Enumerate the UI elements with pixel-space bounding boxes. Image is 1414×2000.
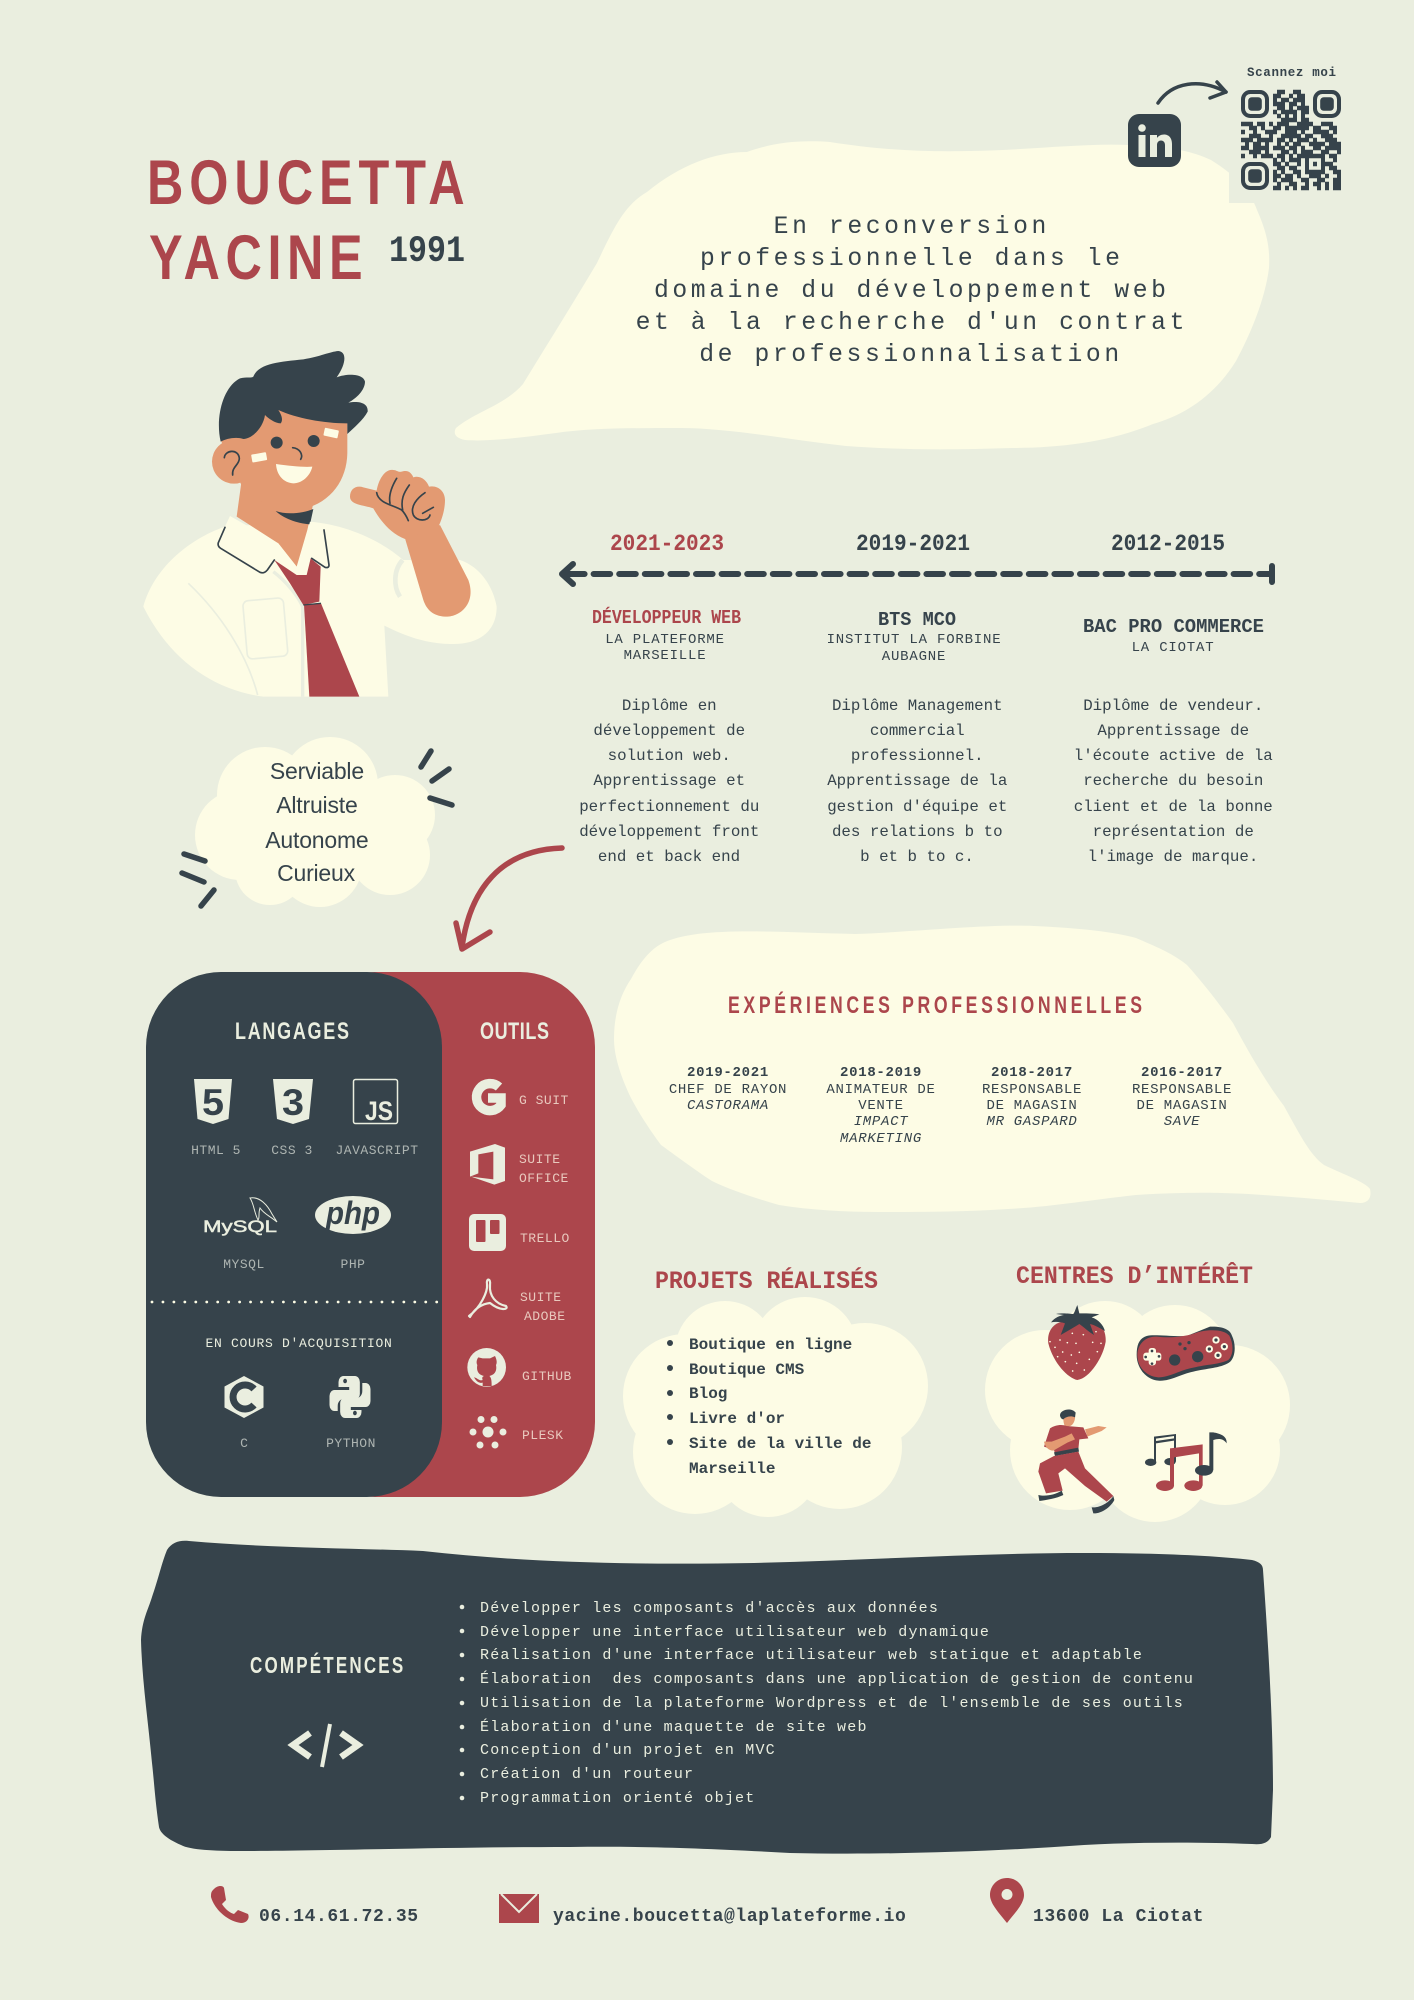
column: BTS MCO: professionnel.	[851, 747, 984, 765]
icon: Office	[470, 1144, 505, 1185]
experience: Impact Marketing: MARKETING	[840, 1131, 922, 1147]
arrow: LinkedIn to QR	[1158, 82, 1226, 103]
column: développeur web: perfectionnement du	[579, 798, 759, 816]
timeline years: 2019-2021	[856, 531, 970, 557]
icon: MySQL: MySQL	[203, 1217, 277, 1236]
experience: Save: SAVE	[1164, 1114, 1200, 1130]
cloud shape	[985, 1301, 1290, 1522]
projects text: Marseille	[689, 1460, 775, 1478]
panel shape	[141, 1541, 1273, 1854]
timeline years: 2021-2023	[610, 531, 724, 557]
neck	[237, 480, 313, 567]
column: bac pro commerce: recherche du besoin	[1083, 772, 1263, 790]
heading: outils: OUTILS	[480, 1019, 549, 1045]
column: bac pro commerce: Apprentissage de	[1097, 722, 1249, 740]
label: MySQL: MYSQL	[223, 1257, 265, 1272]
icon: Plesk	[470, 1416, 506, 1448]
experience: Save	[1132, 1065, 1232, 1130]
label: GitHub: GITHUB	[522, 1369, 572, 1384]
objective text: domaine du développement web	[654, 277, 1170, 305]
skills list: Élaboration des composants dans une application de gestion de contenu	[480, 1670, 1194, 1688]
column: bac pro commerce: BAC PRO COMMERCE	[1083, 616, 1264, 638]
icon: Trello	[469, 1214, 506, 1251]
experience: Impact Marketing: 2018-2019	[840, 1065, 922, 1081]
experience: Save: 2016-2017	[1141, 1065, 1223, 1081]
label: JavaScript: JAVASCRIPT	[335, 1143, 419, 1158]
qualities text: Altruiste	[276, 792, 358, 818]
icon: JavaScript: JS	[365, 1096, 393, 1126]
label: Suite Adobe: SUITE	[520, 1290, 562, 1305]
column: développeur web: Diplôme en	[622, 697, 717, 715]
icon: map pin	[990, 1878, 1024, 1923]
glasses glints, eyes, nose, mouth	[224, 428, 339, 483]
label: Plesk: PLESK	[522, 1428, 564, 1443]
qualities text: Serviable	[270, 758, 364, 784]
skills list: Développer une interface utilisateur web dynamique	[480, 1624, 990, 1641]
skills list: Conception d'un projet en MVC	[480, 1742, 776, 1759]
illustration: smiling man in shirt and tie	[143, 351, 497, 697]
dotted separator	[152, 1301, 440, 1303]
sparkle strokes	[182, 751, 452, 906]
experience: Castorama: CHEF DE RAYON	[669, 1082, 787, 1098]
contact: location	[990, 1878, 1204, 1927]
label: en cours d'acquisition: EN COURS D'ACQUISITION	[205, 1336, 393, 1351]
skills list: Programmation orienté objet	[480, 1790, 755, 1807]
qualities text: Curieux	[277, 860, 356, 886]
hair	[219, 351, 368, 442]
column: développeur web: LA PLATEFORME	[605, 632, 725, 648]
arrow: dashed timeline	[562, 564, 1272, 584]
experience: Save: RESPONSABLE	[1132, 1082, 1232, 1098]
cloud: projects list	[623, 1297, 928, 1517]
panel: languages and tools	[146, 972, 595, 1497]
projects text: Boutique CMS	[689, 1361, 805, 1379]
shirt	[143, 522, 497, 697]
cloud: personal qualities	[182, 737, 452, 907]
icon: phone	[211, 1886, 249, 1923]
column: BTS MCO: AUBAGNE	[882, 649, 946, 665]
heading: EXPÉRIENCES PROFESSIONNELLES	[728, 990, 1142, 1019]
icon: HTML5: 5	[202, 1082, 224, 1123]
column: BTS MCO: b et b to c.	[860, 848, 974, 866]
contact: email	[499, 1894, 906, 1927]
arrow: curved red pointing to skills panel	[456, 848, 562, 949]
experience: Impact Marketing	[826, 1065, 936, 1147]
label: Suite Office: OFFICE	[519, 1171, 569, 1186]
column: développeur web: développement de	[593, 722, 745, 740]
column: BTS MCO	[827, 609, 1017, 866]
icon: envelope	[499, 1894, 539, 1923]
timeline years	[610, 531, 1225, 557]
phone number: 06.14.61.72.35	[259, 1907, 419, 1927]
icon: code brackets	[293, 1724, 358, 1767]
icon: game controller	[1137, 1327, 1235, 1381]
column: développeur web: Apprentissage et	[593, 772, 745, 790]
speech bubble: objective	[455, 141, 1269, 449]
timeline	[562, 531, 1282, 866]
label: HTML 5: HTML 5	[191, 1143, 241, 1158]
projects text: Livre d'or	[689, 1410, 785, 1428]
heading: projets réalisés: PROJETS RÉALISÉS	[655, 1266, 878, 1296]
skills list: Réalisation d'une interface utilisateur web statique et adaptable	[480, 1647, 1143, 1664]
column: bac pro commerce: client et de la bonne	[1074, 798, 1273, 816]
experience: Save: DE MAGASIN	[1136, 1098, 1228, 1114]
name second line: YACINE	[149, 223, 363, 293]
icon: JavaScript	[354, 1080, 398, 1126]
bubble shape	[614, 926, 1371, 1212]
icon: strawberry	[1048, 1305, 1106, 1380]
objective text: de professionnalisation	[699, 341, 1123, 369]
tie	[274, 558, 359, 697]
objective text: professionnelle dans le	[700, 245, 1124, 273]
cloud: interests	[985, 1301, 1290, 1522]
experience: Mr Gaspard: RESPONSABLE	[982, 1082, 1082, 1098]
arm and fist	[350, 470, 471, 617]
column: BTS MCO: Diplôme Management	[832, 697, 1003, 715]
beard shadow	[276, 509, 313, 524]
label: CSS 3: CSS 3	[271, 1143, 313, 1158]
qualities text: Autonome	[265, 827, 369, 853]
experience: Castorama: 2019-2021	[687, 1065, 769, 1081]
projects text	[689, 1336, 871, 1478]
experience: Mr Gaspard	[982, 1065, 1082, 1130]
QR code block with LinkedIn icon	[1128, 60, 1414, 203]
column: développeur web	[579, 607, 769, 866]
scan label: Scannez moi	[1247, 66, 1336, 80]
title: name and birth year	[147, 148, 465, 293]
objective text: et à la recherche d'un contrat	[636, 309, 1188, 337]
icon: MySQL	[203, 1198, 277, 1236]
experience: Impact Marketing: VENTE	[858, 1098, 904, 1114]
column: développeur web: solution web.	[608, 747, 731, 765]
bullets	[460, 1605, 464, 1800]
icon: CSS3: 3	[282, 1082, 304, 1123]
experience: Impact Marketing: ANIMATEUR DE	[826, 1082, 936, 1098]
contact: phone	[211, 1886, 419, 1927]
city: 13600 La Ciotat	[1033, 1907, 1204, 1927]
column: BTS MCO: BTS MCO	[878, 609, 956, 631]
icon: G Suite	[477, 1084, 501, 1111]
panel: compétences	[141, 1541, 1273, 1854]
cloud shape	[623, 1297, 928, 1517]
skills list: Création d'un routeur	[480, 1766, 694, 1783]
heading: langages: LANGAGES	[235, 1019, 349, 1045]
column: BTS MCO: INSTITUT LA FORBINE	[827, 632, 1001, 648]
column: développeur web: end et back end	[598, 848, 740, 866]
QR code	[1241, 92, 1341, 188]
label: C: C	[240, 1436, 248, 1451]
experience: Mr Gaspard: DE MAGASIN	[986, 1098, 1078, 1114]
label: Python: PYTHON	[326, 1436, 376, 1451]
label: PHP: PHP	[341, 1257, 365, 1272]
label: Suite Office: SUITE	[519, 1152, 561, 1167]
speech bubble: professional experience	[614, 926, 1371, 1212]
column: BTS MCO: des relations b to	[832, 823, 1003, 841]
ear	[212, 440, 256, 484]
icon: CSS3	[273, 1079, 313, 1124]
projects text: Blog	[689, 1385, 727, 1403]
name first line: BOUCETTA	[147, 148, 465, 218]
experience: Mr Gaspard: MR GASPARD	[986, 1114, 1078, 1130]
column: bac pro commerce: l'image de marque.	[1088, 848, 1258, 866]
column: bac pro commerce	[1074, 616, 1282, 866]
heading: COMPÉTENCES	[250, 1653, 403, 1679]
bullets	[667, 1340, 673, 1445]
icon: PHP: php	[325, 1195, 380, 1231]
column: bac pro commerce: LA CIOTAT	[1132, 640, 1214, 656]
label: Trello: TRELLO	[520, 1231, 570, 1246]
label: G Suite: G SUIT	[519, 1093, 569, 1108]
experience: Castorama	[669, 1065, 787, 1114]
icon: martial artist	[1038, 1410, 1114, 1513]
label: Suite Adobe: ADOBE	[524, 1309, 566, 1324]
birth year: 1991	[389, 231, 465, 273]
face	[221, 403, 347, 511]
icon: LinkedIn	[1128, 114, 1181, 167]
column: BTS MCO: commercial	[870, 722, 965, 740]
heading: centres d'intérêt: CENTRES D’INTÉRÊT	[1016, 1261, 1253, 1291]
projects text: Site de la ville de	[689, 1435, 871, 1453]
tools background	[300, 972, 595, 1497]
skills list: Utilisation de la plateforme Wordpress et de l'ensemble de ses outils	[480, 1695, 1184, 1712]
objective text: En reconversion	[774, 213, 1050, 241]
skills list	[480, 1600, 1194, 1807]
shirt details	[188, 560, 403, 697]
icon: HTML5	[194, 1079, 232, 1124]
icon: Acrobat	[469, 1280, 507, 1317]
cloud shape	[195, 737, 435, 907]
QR background patch	[1229, 60, 1414, 203]
column: bac pro commerce: l'écoute active de la	[1074, 747, 1273, 765]
experience: Impact Marketing: IMPACT	[854, 1114, 908, 1130]
column: bac pro commerce: représentation de	[1093, 823, 1254, 841]
projects text: Boutique en ligne	[689, 1336, 852, 1354]
column: développeur web: DÉVELOPPEUR WEB	[592, 607, 741, 629]
languages background	[146, 972, 442, 1497]
collar	[218, 516, 329, 573]
email address: yacine.boucetta@laplateforme.io	[553, 1907, 906, 1927]
icon: music notes	[1145, 1432, 1227, 1491]
skills list: Élaboration d'une maquette de site web	[480, 1718, 868, 1736]
icon: GitHub	[467, 1348, 506, 1387]
bubble shape	[455, 141, 1269, 449]
column: développeur web: MARSEILLE	[624, 648, 706, 664]
experience: Castorama: CASTORAMA	[687, 1098, 769, 1114]
column: BTS MCO: Apprentissage de la	[827, 772, 1007, 790]
icon: C	[224, 1376, 264, 1418]
column: développeur web: développement front	[579, 823, 759, 841]
column: BTS MCO: gestion d'équipe et	[827, 798, 1007, 816]
timeline years: 2012-2015	[1111, 531, 1225, 557]
column: bac pro commerce: Diplôme de vendeur.	[1083, 697, 1263, 715]
experience: Mr Gaspard: 2018-2017	[991, 1065, 1073, 1081]
skills list: Développer les composants d'accès aux données	[480, 1600, 939, 1617]
icon: Python	[330, 1376, 370, 1418]
